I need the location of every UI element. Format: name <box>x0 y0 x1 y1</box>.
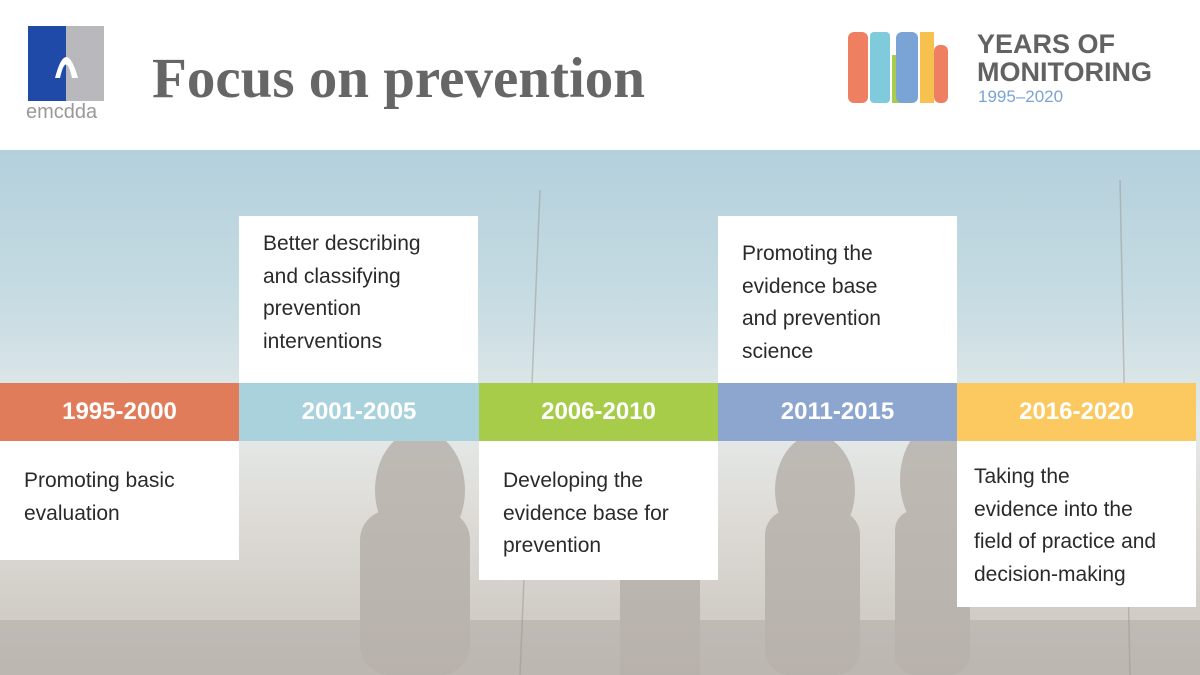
box 5: Taking the <box>974 465 1070 488</box>
box 5: evidence into the <box>974 498 1133 520</box>
logo: 25 years of monitoring: 1995–2020 <box>978 87 1063 106</box>
box 5: decision-making <box>974 562 1126 586</box>
timeline bar: 2001-2005 <box>302 398 416 425</box>
logo: emcdda: emcdda <box>26 101 97 123</box>
box 4 <box>718 216 957 383</box>
timeline bar <box>0 383 1196 441</box>
box 1 <box>0 441 239 560</box>
timeline bar: 1995-2000 <box>62 398 177 425</box>
background photo <box>0 150 1200 675</box>
logo: emcdda <box>26 26 104 123</box>
box 2: prevention <box>263 297 361 320</box>
logo: 25 years of monitoring: MONITORING <box>977 57 1152 87</box>
logo: 25 years of monitoring <box>848 29 1152 106</box>
box 3: Developing the <box>503 469 643 492</box>
box 2: Better describing <box>263 232 421 255</box>
timeline bar: 2006-2010 <box>541 398 656 425</box>
box 2 <box>239 216 478 383</box>
box 2: and classifying <box>263 264 401 288</box>
box 5 <box>957 441 1196 607</box>
logo: 25 years of monitoring: YEARS OF <box>977 29 1115 59</box>
box 3: evidence base for <box>503 502 669 524</box>
title: Focus on prevention <box>152 47 645 110</box>
box 4: evidence base <box>742 274 877 298</box>
box 2: interventions <box>263 330 382 352</box>
box 5: field of practice and <box>974 530 1156 553</box>
box 4: science <box>742 340 813 362</box>
box 1: Promoting basic <box>24 469 175 492</box>
box 4: Promoting the <box>742 242 873 265</box>
timeline bar: 2011-2015 <box>781 398 894 425</box>
box 4: and prevention <box>742 307 881 330</box>
box 1: evaluation <box>24 502 120 524</box>
box 3 <box>479 441 718 580</box>
box 3: prevention <box>503 534 601 557</box>
timeline bar: 2016-2020 <box>1019 398 1134 425</box>
